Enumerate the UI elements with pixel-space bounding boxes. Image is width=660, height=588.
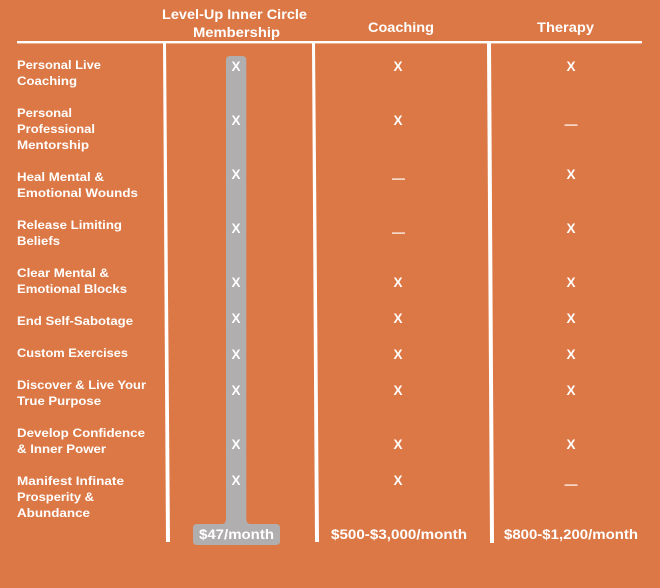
row labels: True Purpose <box>17 394 101 408</box>
row labels: Discover & Live Your <box>17 378 146 392</box>
row labels: Beliefs <box>17 234 60 248</box>
price: coaching: $500-$3,000/month <box>331 527 467 542</box>
coaching column marks: X <box>393 311 403 326</box>
row labels: Emotional Wounds <box>17 186 138 200</box>
row labels: Prosperity & <box>17 490 94 504</box>
coaching column marks <box>392 59 405 488</box>
row labels: Personal <box>17 106 72 120</box>
row labels: End Self-Sabotage <box>17 314 133 328</box>
membership column marks: X <box>231 113 241 128</box>
membership column marks: X <box>231 59 241 74</box>
row labels: Abundance <box>17 506 90 520</box>
heading: Therapy: Therapy <box>537 20 595 35</box>
row labels: Personal Live <box>17 58 101 72</box>
row labels <box>17 58 146 520</box>
membership column marks: X <box>231 275 241 290</box>
therapy column marks <box>564 59 578 486</box>
coaching column marks: X <box>393 113 403 128</box>
therapy column marks: X <box>566 383 576 398</box>
membership column marks: X <box>231 347 241 362</box>
membership column marks: X <box>231 383 241 398</box>
row labels: Clear Mental & <box>17 266 109 280</box>
row labels: Manifest Infinate <box>17 474 124 488</box>
heading: Level-Up Inner Circle Membership: Level-Up Inner Circle <box>162 7 308 22</box>
row labels: Develop Confidence <box>17 426 145 440</box>
therapy column marks: X <box>566 437 576 452</box>
coaching column marks: X <box>393 275 403 290</box>
price: therapy: $800-$1,200/month <box>504 527 638 542</box>
row labels: Professional <box>17 122 95 136</box>
row labels: Heal Mental & <box>17 170 104 184</box>
row labels: Emotional Blocks <box>17 282 127 296</box>
heading: Coaching: Coaching <box>368 20 434 35</box>
coaching column marks: X <box>393 473 403 488</box>
coaching column marks: X <box>393 59 403 74</box>
therapy column marks: X <box>566 221 576 236</box>
membership column marks: X <box>231 167 241 182</box>
highlight bar: membership column <box>193 56 280 545</box>
therapy column marks: X <box>566 311 576 326</box>
heading: Level-Up Inner Circle Membership: Membership <box>193 25 280 40</box>
price: membership: $47/month <box>199 527 274 542</box>
membership column marks <box>231 59 241 488</box>
therapy column marks: X <box>566 167 576 182</box>
therapy column marks: X <box>566 275 576 290</box>
row labels: Coaching <box>17 74 77 88</box>
membership column marks: X <box>231 311 241 326</box>
therapy column marks: X <box>566 347 576 362</box>
row labels: & Inner Power <box>17 442 106 456</box>
heading: Level-Up Inner Circle Membership <box>162 7 308 40</box>
row labels: Release Limiting <box>17 218 122 232</box>
therapy column marks: X <box>566 59 576 74</box>
coaching column marks: X <box>393 437 403 452</box>
coaching column marks: X <box>393 383 403 398</box>
row labels: Custom Exercises <box>17 346 128 360</box>
coaching column marks: X <box>393 347 403 362</box>
membership column marks: X <box>231 473 241 488</box>
row labels: Mentorship <box>17 138 89 152</box>
membership column marks: X <box>231 437 241 452</box>
membership column marks: X <box>231 221 241 236</box>
